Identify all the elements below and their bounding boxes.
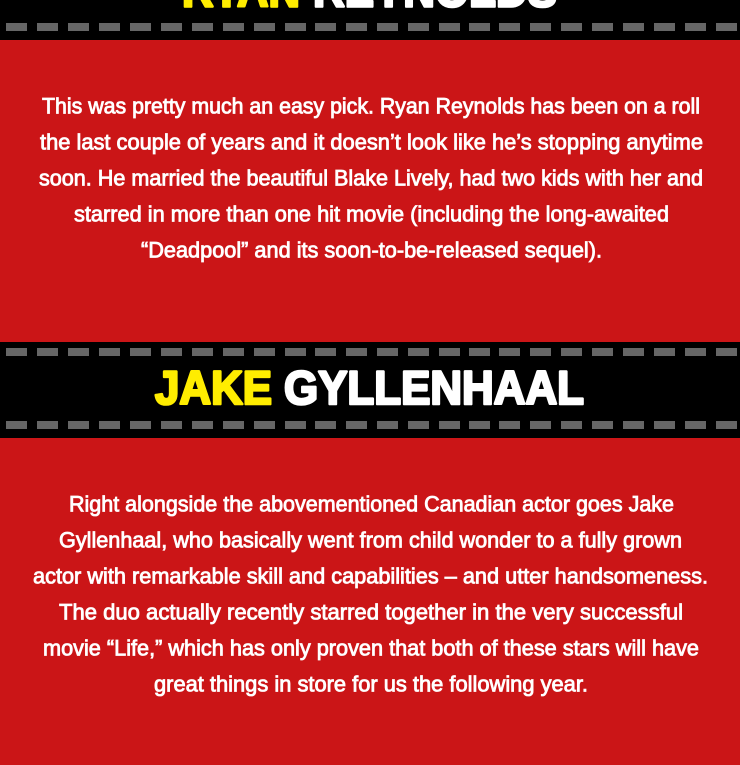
banner: Jake Gyllenhaal	[0, 342, 740, 438]
text block: Ryan Reynolds description: soon. He married the beautiful Blake Lively, had two kids with her and	[39, 166, 703, 190]
banner: Ryan Reynolds	[0, 0, 740, 40]
text block: Ryan Reynolds description: the last couple of years and it doesn’t look like he’s stopping anytime	[40, 130, 703, 154]
heading: Ryan Reynolds	[182, 0, 557, 16]
dashed road line	[6, 23, 737, 31]
dashed road line: top	[6, 348, 737, 356]
text block: Jake Gyllenhaal description: Gyllenhaal, who basically went from child wonder to a fully grown	[59, 528, 682, 552]
text block: Jake Gyllenhaal description	[33, 492, 708, 696]
heading: Jake Gyllenhaal	[155, 361, 584, 414]
text block: Ryan Reynolds description: “Deadpool” and its soon-to-be-released sequel).	[141, 238, 602, 262]
text block: Jake Gyllenhaal description: Right alongside the abovementioned Canadian actor goes Jake	[69, 492, 674, 516]
dashed road line: bottom	[6, 421, 737, 429]
text block: Jake Gyllenhaal description: great things in store for us the following year.	[154, 672, 588, 696]
heading: Jake Gyllenhaal: JAKE	[155, 361, 272, 414]
text block: Jake Gyllenhaal description: The duo actually recently starred together in the very successful	[59, 600, 683, 624]
heading: Jake Gyllenhaal: GYLLENHAAL	[284, 361, 584, 414]
text block: Ryan Reynolds description: This was pretty much an easy pick. Ryan Reynolds has been on a roll	[42, 94, 700, 118]
text block: Ryan Reynolds description: starred in more than one hit movie (including the long-awaited	[74, 202, 669, 226]
text block: Ryan Reynolds description	[39, 94, 703, 262]
text block: Jake Gyllenhaal description: movie “Life,” which has only proven that both of these stars will have	[43, 636, 699, 660]
text block: Jake Gyllenhaal description: actor with remarkable skill and capabilities – and utter handsomeness.	[33, 564, 708, 588]
